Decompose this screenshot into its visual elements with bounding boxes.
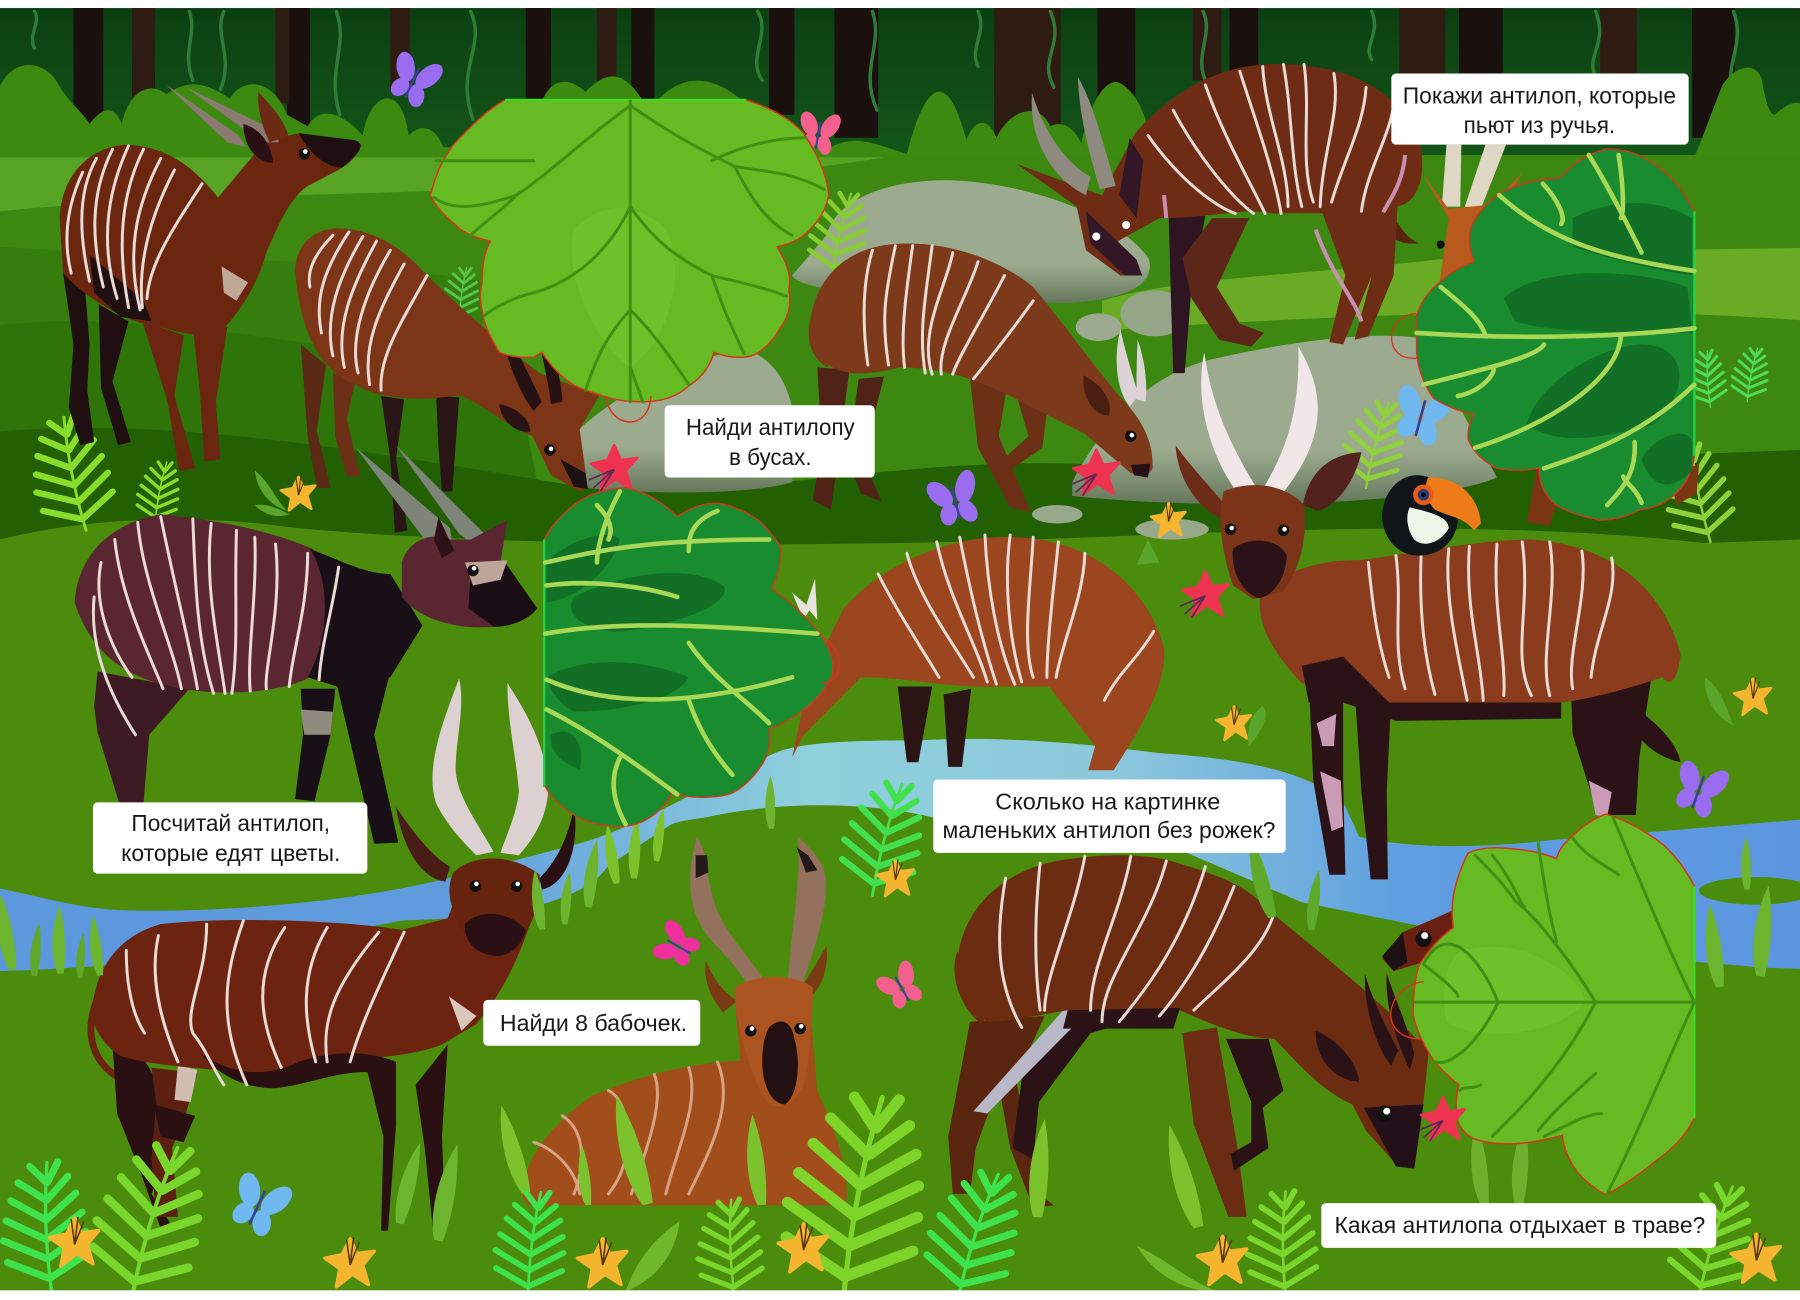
callout: hornless calves: Сколько на картинке [995,788,1220,814]
callout: find 8 butterflies [483,1000,700,1046]
bottom white page margin [0,1290,1800,1300]
antelope: hidden head behind right leaf [1421,145,1699,526]
callout: count flower eaters: Посчитай антилоп, [131,810,330,836]
antelope: top right large [1017,64,1422,373]
antelope: centre top grazing [809,244,1153,512]
antelope: bottom right grazing [948,855,1430,1217]
antelope: drinking in stream [792,535,1164,770]
leaf sticker: lower right light [1391,814,1694,1195]
small background ferns [20,188,1771,550]
callout: hornless calves [933,779,1286,853]
callout: resting antelope [1321,1203,1716,1248]
callout: count flower eaters [93,802,367,874]
callout: find antelope with beads: в бусах. [729,444,812,470]
antelope: small head behind lower leaf [1382,907,1460,971]
far bushes [0,65,1800,157]
grass clumps [0,776,1776,1242]
callout: resting antelope: Какая антилопа отдыхает в траве? [1335,1212,1705,1238]
antelope: resting in grass [522,837,847,1205]
antelope: dark purple [75,445,537,844]
rocks [574,180,1497,540]
callout: show drinking antelopes: Покажи антилоп, которые [1403,82,1676,108]
red flower over lower leaf [1419,1097,1465,1141]
yellow flowers [49,471,1780,1287]
callout: show drinking antelopes: пьют из ручья. [1464,112,1615,138]
leaf sticker: middle dark [544,488,839,827]
red flowers [589,445,1228,618]
leaf sticker: top light [430,100,829,422]
callout: find antelope with beads [665,405,875,478]
antelope: bottom left standing [91,678,575,1231]
antelope: large front-facing [1176,347,1681,879]
toucan [1382,475,1481,556]
antelope: second left grazing [295,228,599,533]
red tab arc [606,396,651,422]
callout: find 8 butterflies: Найди 8 бабочек. [500,1010,687,1036]
foreground ferns [0,775,1761,1300]
antelope: upper left standing [60,85,362,471]
callout: find antelope with beads: Найди антилопу [686,414,855,440]
river [0,739,1800,1290]
callout: show drinking antelopes [1391,73,1689,145]
leaf sticker: upper right dark [1392,149,1694,520]
butterflies [216,42,1737,1246]
callout: hornless calves: маленьких антилоп без рожек? [942,817,1275,843]
forest backdrop [0,8,1800,169]
callout: count flower eaters: которые едят цветы. [121,840,340,866]
